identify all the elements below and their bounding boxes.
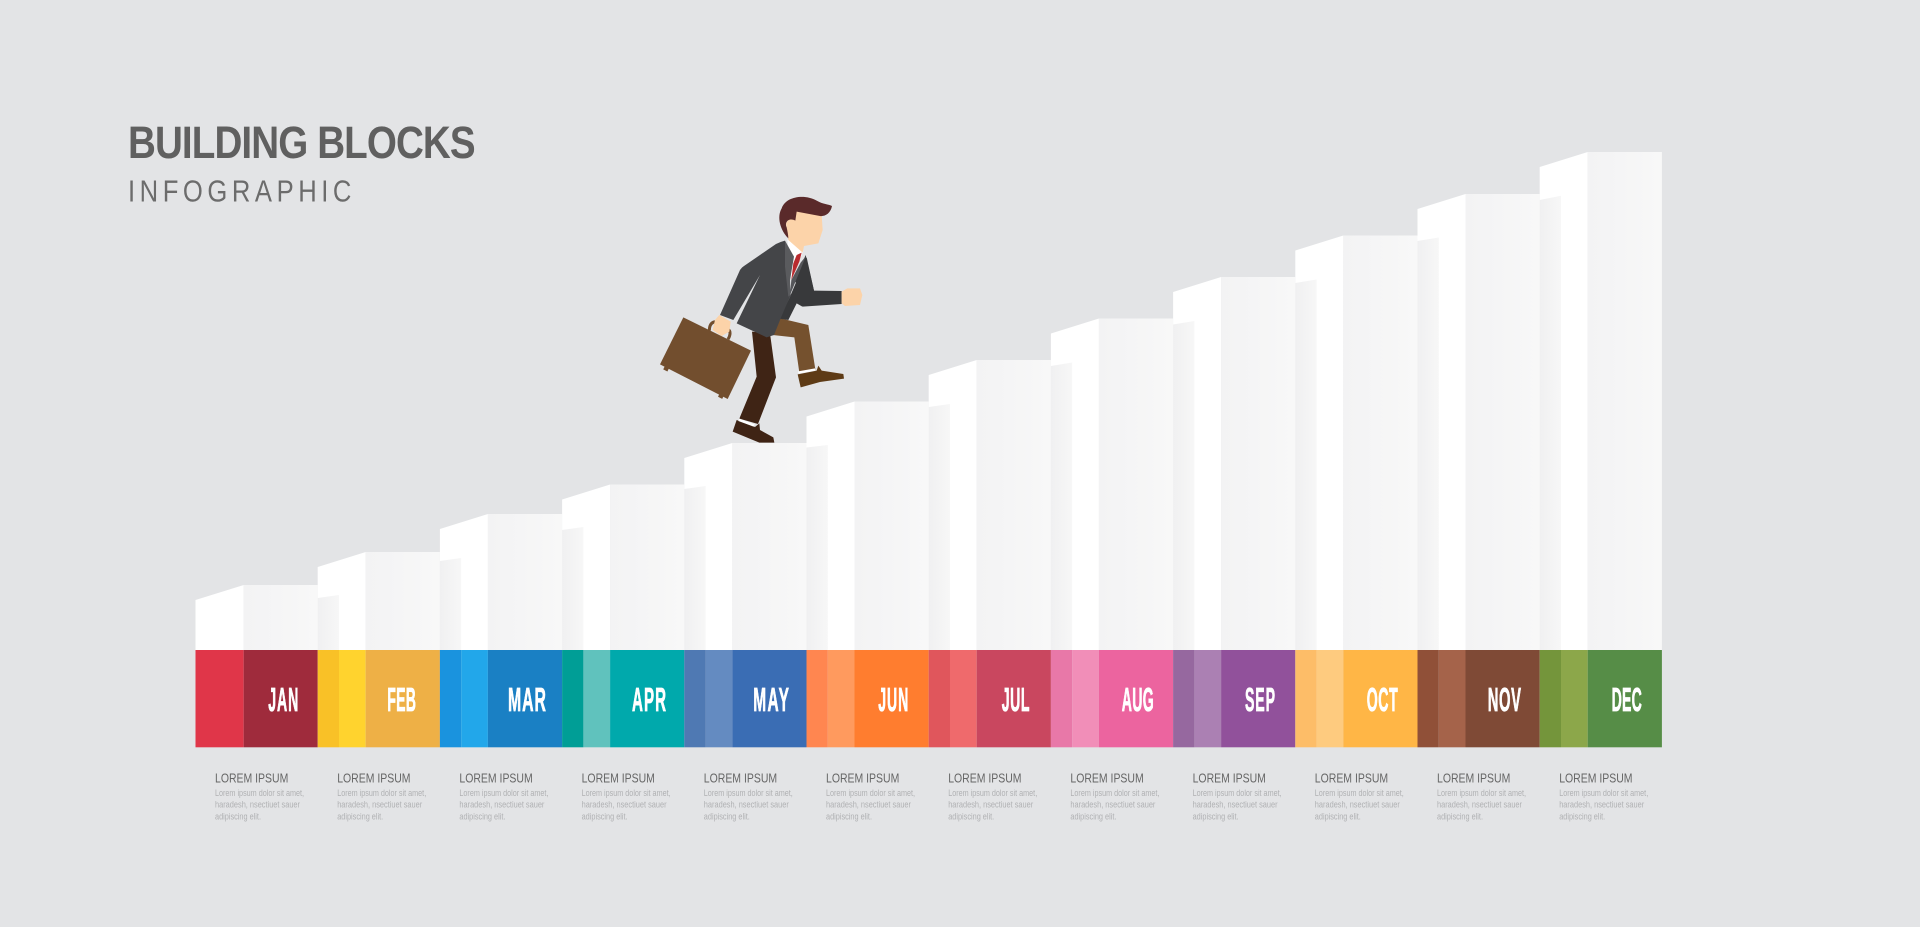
caption: adipiscing elit. bbox=[826, 812, 872, 822]
block: August bbox=[1051, 318, 1173, 822]
caption: adipiscing elit. bbox=[337, 812, 383, 822]
caption: haradesh, nsectiuet sauer bbox=[1070, 800, 1156, 811]
caption bbox=[1315, 771, 1404, 822]
caption: Lorem ipsum dolor sit amet, bbox=[459, 788, 548, 799]
colour band bbox=[1051, 650, 1173, 747]
caption: Lorem ipsum dolor sit amet, bbox=[1437, 788, 1526, 799]
caption bbox=[1193, 771, 1282, 822]
colour band bbox=[684, 650, 806, 747]
stair column bbox=[929, 360, 1051, 650]
block: March bbox=[440, 514, 562, 822]
title: BUILDING BLOCKS bbox=[128, 117, 476, 167]
stair column bbox=[1051, 318, 1173, 650]
stair column bbox=[684, 443, 806, 650]
caption: adipiscing elit. bbox=[948, 812, 994, 822]
caption: LOREM IPSUM bbox=[948, 771, 1022, 786]
back leg and shoe bbox=[733, 332, 776, 443]
caption: adipiscing elit. bbox=[582, 812, 628, 822]
caption: haradesh, nsectiuet sauer bbox=[337, 800, 423, 811]
caption: adipiscing elit. bbox=[215, 812, 261, 822]
head bbox=[779, 197, 832, 253]
month label: SEP bbox=[1245, 682, 1275, 719]
month label: NOV bbox=[1488, 683, 1521, 719]
caption bbox=[948, 771, 1037, 822]
caption: haradesh, nsectiuet sauer bbox=[1559, 800, 1645, 811]
caption: LOREM IPSUM bbox=[215, 771, 288, 786]
stair column bbox=[196, 585, 318, 650]
caption: LOREM IPSUM bbox=[582, 771, 655, 786]
caption: Lorem ipsum dolor sit amet, bbox=[948, 788, 1037, 799]
caption: haradesh, nsectiuet sauer bbox=[582, 800, 667, 811]
colour band bbox=[318, 650, 440, 747]
colour band bbox=[1540, 650, 1662, 747]
colour band bbox=[562, 650, 684, 747]
block: December bbox=[1540, 152, 1662, 822]
front leg and shoe bbox=[773, 318, 844, 387]
caption: haradesh, nsectiuet sauer bbox=[826, 800, 912, 811]
caption: haradesh, nsectiuet sauer bbox=[948, 800, 1034, 811]
block: February bbox=[318, 552, 440, 822]
caption: adipiscing elit. bbox=[1070, 812, 1116, 822]
caption: Lorem ipsum dolor sit amet, bbox=[582, 788, 671, 799]
block: April bbox=[562, 484, 684, 822]
colour band bbox=[1295, 650, 1418, 747]
caption: LOREM IPSUM bbox=[337, 771, 411, 786]
jacket bbox=[720, 241, 814, 337]
block: September bbox=[1173, 277, 1295, 822]
icon: businessman climbing with briefcase bbox=[660, 197, 862, 443]
colour band bbox=[440, 650, 562, 747]
caption bbox=[1437, 771, 1526, 822]
month label: MAR bbox=[508, 680, 546, 719]
block: May bbox=[684, 443, 806, 822]
caption: Lorem ipsum dolor sit amet, bbox=[826, 788, 915, 799]
caption: Lorem ipsum dolor sit amet, bbox=[1559, 788, 1648, 799]
stair column bbox=[1540, 152, 1662, 650]
hand on handle bbox=[713, 315, 731, 336]
caption: LOREM IPSUM bbox=[1437, 771, 1510, 786]
stair column bbox=[440, 514, 562, 650]
caption: Lorem ipsum dolor sit amet, bbox=[1070, 788, 1159, 799]
caption bbox=[704, 771, 793, 822]
caption: adipiscing elit. bbox=[459, 812, 505, 822]
caption bbox=[1070, 771, 1159, 822]
caption bbox=[1559, 771, 1648, 822]
caption: LOREM IPSUM bbox=[1193, 771, 1266, 786]
caption: adipiscing elit. bbox=[1437, 812, 1483, 822]
caption: LOREM IPSUM bbox=[1070, 771, 1144, 786]
caption: Lorem ipsum dolor sit amet, bbox=[704, 788, 793, 799]
block: October bbox=[1295, 236, 1418, 822]
stair column bbox=[806, 402, 929, 650]
caption: haradesh, nsectiuet sauer bbox=[1193, 800, 1278, 811]
caption: LOREM IPSUM bbox=[704, 771, 777, 786]
caption bbox=[459, 771, 548, 822]
colour band bbox=[1173, 650, 1295, 747]
subtitle: INFOGRAPHIC bbox=[128, 174, 351, 208]
caption: LOREM IPSUM bbox=[1315, 771, 1388, 786]
shirt and tie bbox=[787, 239, 803, 280]
caption: haradesh, nsectiuet sauer bbox=[215, 800, 301, 811]
month label: JAN bbox=[268, 682, 298, 719]
month label: OCT bbox=[1367, 682, 1398, 719]
month label: APR bbox=[632, 680, 666, 719]
caption: haradesh, nsectiuet sauer bbox=[1437, 800, 1523, 811]
month label: FEB bbox=[387, 682, 416, 719]
caption: adipiscing elit. bbox=[1559, 812, 1605, 822]
stair column bbox=[318, 552, 440, 650]
caption bbox=[215, 771, 304, 822]
caption: adipiscing elit. bbox=[704, 812, 750, 822]
block: June bbox=[806, 402, 929, 822]
colour band bbox=[1418, 650, 1540, 747]
caption: LOREM IPSUM bbox=[826, 771, 899, 786]
briefcase bbox=[660, 317, 751, 399]
far arm and fist bbox=[795, 255, 862, 307]
block: July bbox=[929, 360, 1051, 822]
caption: Lorem ipsum dolor sit amet, bbox=[215, 788, 304, 799]
block: November bbox=[1418, 194, 1540, 822]
caption: adipiscing elit. bbox=[1193, 812, 1239, 822]
caption: adipiscing elit. bbox=[1315, 812, 1361, 822]
month label: DEC bbox=[1612, 682, 1642, 719]
caption bbox=[582, 771, 671, 822]
colour band bbox=[929, 650, 1051, 747]
stair column bbox=[1418, 194, 1540, 650]
caption: Lorem ipsum dolor sit amet, bbox=[1193, 788, 1282, 799]
month label: MAY bbox=[753, 680, 789, 719]
title bbox=[128, 117, 476, 208]
caption: LOREM IPSUM bbox=[1559, 771, 1632, 786]
caption bbox=[337, 771, 426, 822]
stair column bbox=[1295, 236, 1418, 650]
month label: JUL bbox=[1002, 682, 1030, 719]
caption: haradesh, nsectiuet sauer bbox=[1315, 800, 1400, 811]
colour band bbox=[196, 650, 318, 747]
caption: haradesh, nsectiuet sauer bbox=[704, 800, 789, 811]
stair column bbox=[562, 484, 684, 650]
stair column bbox=[1173, 277, 1295, 650]
month label: JUN bbox=[878, 682, 908, 719]
colour band bbox=[806, 650, 929, 747]
caption: Lorem ipsum dolor sit amet, bbox=[337, 788, 426, 799]
caption: haradesh, nsectiuet sauer bbox=[459, 800, 545, 811]
caption: Lorem ipsum dolor sit amet, bbox=[1315, 788, 1404, 799]
caption bbox=[826, 771, 915, 822]
caption: LOREM IPSUM bbox=[459, 771, 533, 786]
month label: AUG bbox=[1122, 682, 1154, 719]
block: January bbox=[196, 585, 318, 822]
